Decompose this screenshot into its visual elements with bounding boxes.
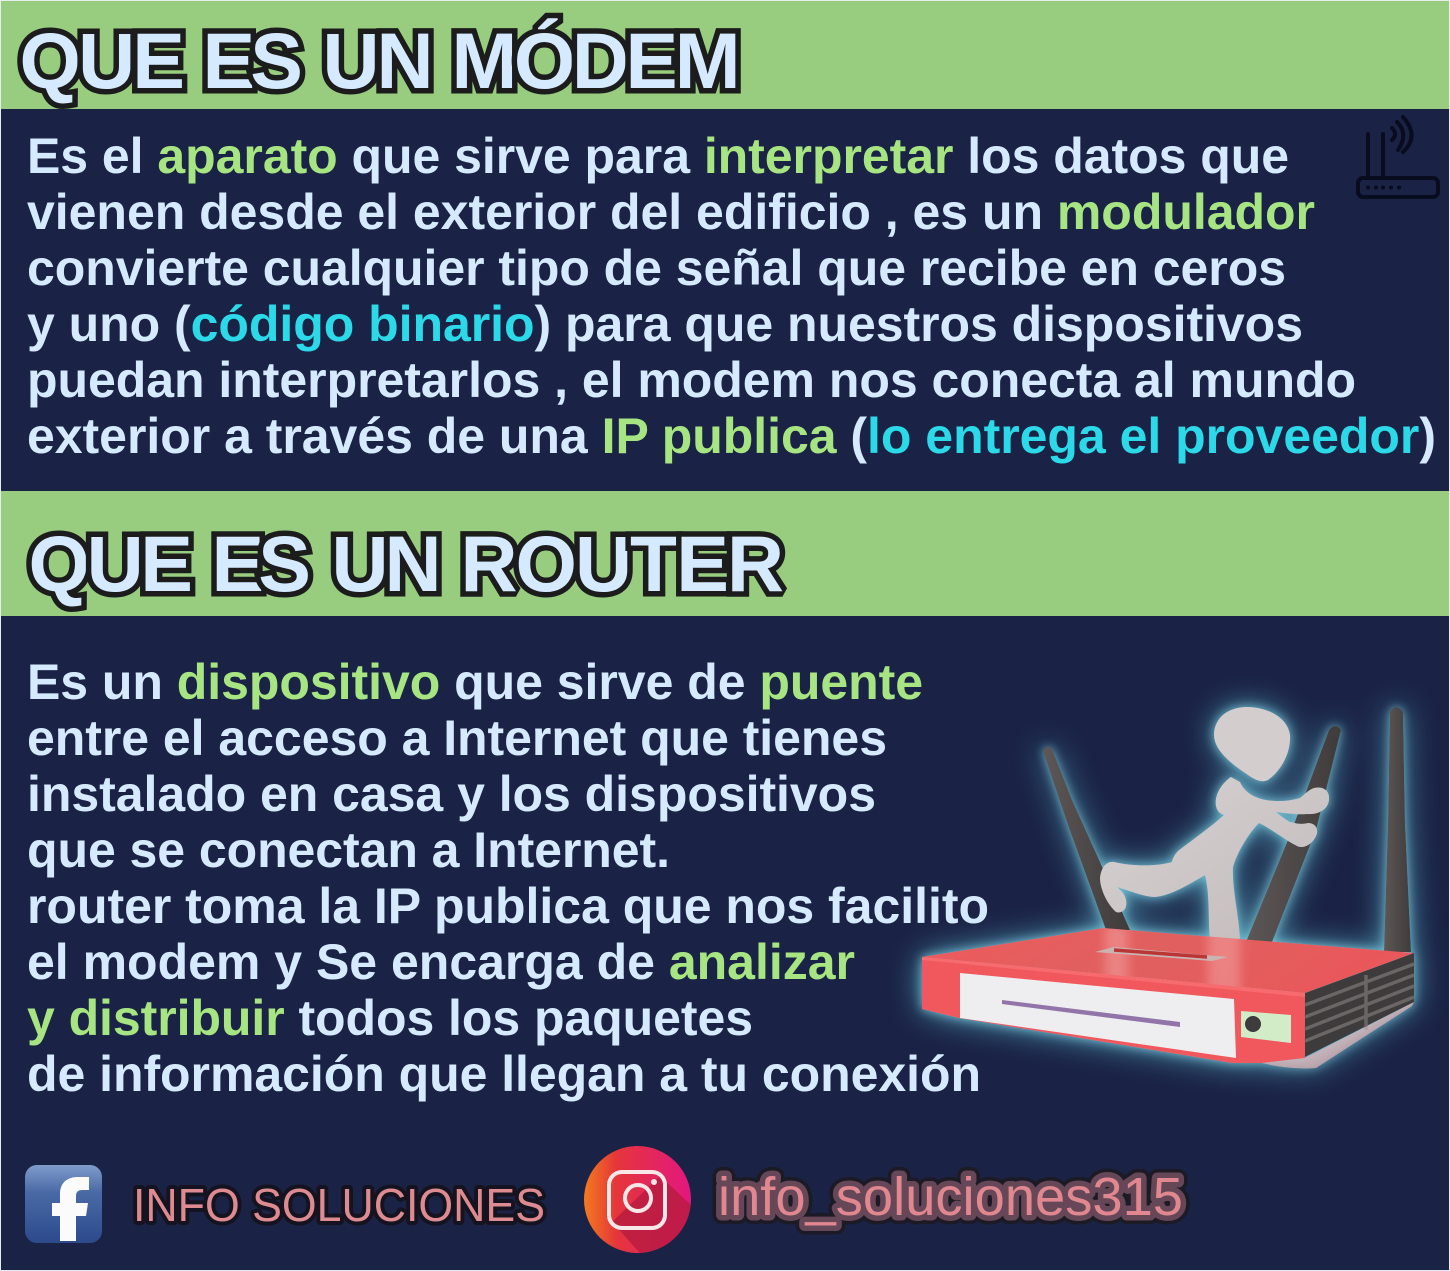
router text line 5: router toma la IP publica que nos facilito — [27, 878, 989, 934]
panel: modem body — [1, 109, 1449, 491]
modem text line 3: convierte cualquier tipo de señal que recibe en ceros — [27, 240, 1286, 296]
top surface reflections — [1101, 928, 1244, 987]
heading: que es un módem: UN — [322, 16, 434, 105]
handle outer outline: info_soluciones315 — [718, 1167, 1183, 1227]
router text line 6: el modem y Se encarga de analizar — [27, 934, 855, 990]
panel: router text block — [27, 654, 989, 1102]
router top front edge — [922, 957, 1305, 997]
instagram handle — [718, 1167, 1183, 1227]
icon: facebook — [25, 1165, 102, 1243]
heading: que es un router — [28, 519, 784, 608]
heading: que es un router: QUE — [28, 519, 193, 608]
figure head — [1214, 707, 1290, 781]
illustration: figure on red router — [922, 707, 1414, 1068]
icon: instagram — [584, 1146, 691, 1253]
purple led strip — [1002, 1000, 1180, 1027]
router front — [922, 957, 1305, 1063]
green label — [1241, 1011, 1291, 1043]
handle text: info_soluciones315 — [718, 1167, 1183, 1227]
figure body — [1100, 777, 1329, 940]
router text line 4: que se conectan a Internet. — [27, 822, 670, 878]
side grille — [1305, 953, 1414, 1057]
heading: que es un módem: QUE — [20, 16, 185, 105]
brand mark — [1114, 950, 1207, 957]
panel: modem text block — [27, 128, 1436, 464]
router text line 7: y distribuir todos los paquetes — [27, 990, 753, 1046]
heading: que es un router: ROUTER — [460, 519, 784, 608]
white panel — [960, 973, 1236, 1058]
modem text line 6: exterior a través de una IP publica (lo entrega el proveedor) — [27, 408, 1436, 464]
middle antenna — [1246, 726, 1341, 942]
router text line 1: Es un dispositivo que sirve de puente — [27, 654, 923, 710]
router text line 3: instalado en casa y los dispositivos — [27, 766, 876, 822]
brand plate — [1095, 947, 1228, 961]
handle inner outline: info_soluciones315 — [718, 1167, 1183, 1227]
modem text line 1: Es el aparato que sirve para interpretar los datos que — [27, 128, 1289, 184]
heading: que es un router: UN — [332, 519, 442, 608]
router top — [922, 928, 1414, 993]
router text line 2: entre el acceso a Internet que tienes — [27, 710, 887, 766]
heading: que es un router: ES — [212, 519, 311, 608]
modem text line 4: y uno (código binario) para que nuestros dispositivos — [27, 296, 1303, 352]
icon: modem with wifi — [1358, 117, 1438, 197]
grille slats — [1305, 964, 1414, 1041]
left antenna — [1043, 747, 1130, 930]
panel: router body — [1, 616, 1449, 1270]
heading: que es un módem: ES — [202, 16, 303, 105]
modem text line 2: vienen desde el exterior del edificio , es un modulador — [27, 184, 1315, 240]
power knob — [1245, 1016, 1261, 1032]
router text line 8: de información que llegan a tu conexión — [27, 1046, 981, 1102]
right antenna — [1384, 707, 1411, 952]
heading: que es un módem: MÓDEM — [452, 16, 740, 105]
base shadow — [1262, 1002, 1414, 1068]
modem text line 5: puedan interpretarlos , el modem nos conecta al mundo — [27, 352, 1356, 408]
panel: router heading band — [1, 491, 1449, 616]
heading: que es un módem — [20, 16, 740, 105]
facebook page name: INFO SOLUCIONES — [133, 1179, 545, 1231]
panel: modem heading band — [1, 1, 1449, 109]
figure — [1100, 707, 1329, 940]
